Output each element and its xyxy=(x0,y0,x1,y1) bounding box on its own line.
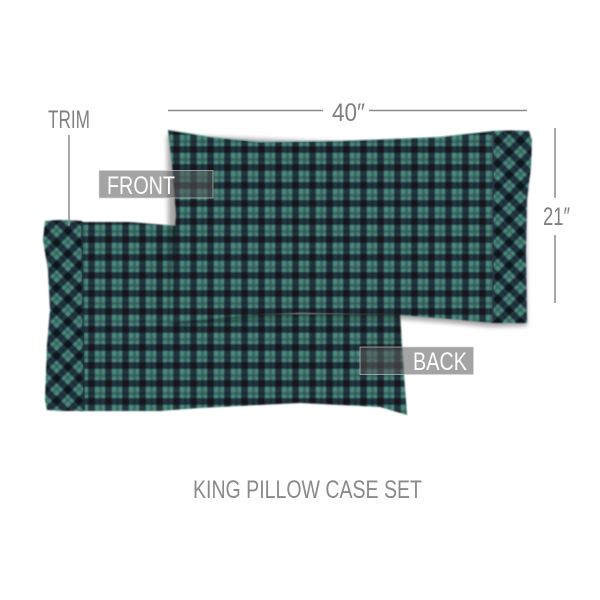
label: FRONT: FRONT xyxy=(107,172,175,200)
back pillow trim cuff xyxy=(43,220,84,411)
back pillow case xyxy=(43,220,407,415)
dimension: width 40 inches: 40″ xyxy=(332,99,365,127)
front pillow case xyxy=(168,130,532,323)
dimension: height 21 inches: 21″ xyxy=(543,203,570,231)
label: BACK xyxy=(360,347,474,376)
cuff seam xyxy=(492,131,494,323)
callout: trim xyxy=(48,106,90,226)
back pillow body xyxy=(80,222,407,415)
top flange edge xyxy=(168,130,493,142)
front pillow shadow xyxy=(167,135,527,327)
caption: KING PILLOW CASE SET xyxy=(193,476,422,504)
cuff seam xyxy=(82,222,84,410)
front pillow trim cuff xyxy=(493,130,532,323)
front pillow body xyxy=(168,130,493,323)
callout: trim: TRIM xyxy=(48,106,90,134)
label: BACK: BACK xyxy=(413,348,467,376)
